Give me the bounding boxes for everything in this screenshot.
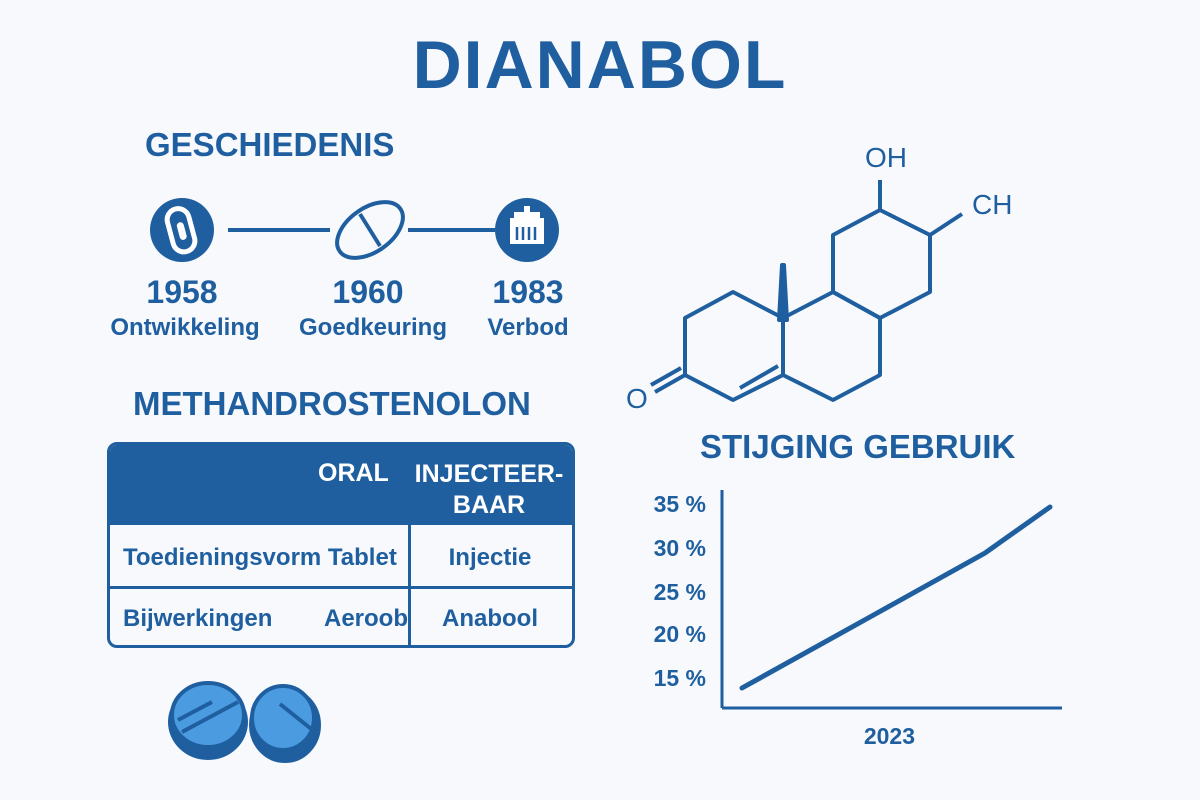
line chart [654, 490, 1062, 749]
line chart: 20 % [654, 621, 706, 647]
icon: pill [327, 191, 413, 269]
molecule [626, 142, 1012, 414]
heading: stijging gebruik: STIJGING GEBRUIK [700, 428, 1015, 465]
timeline labels: 1958 [146, 274, 218, 310]
heading: geschiedenis: GESCHIEDENIS [145, 126, 394, 163]
text: Ontwikkeling [110, 314, 260, 341]
table: Aeroob [324, 605, 408, 632]
molecule: O [626, 383, 648, 414]
icon: building [495, 198, 559, 262]
heading: methandrostenolon: METHANDROSTENOLON [133, 385, 531, 422]
icon: capsule circle [150, 198, 214, 262]
icon: tablets [168, 681, 321, 763]
title: DIANABOL [413, 27, 787, 103]
table [107, 442, 575, 648]
text: 1960 [332, 274, 404, 310]
text: Goedkeuring [299, 314, 447, 341]
line chart: 25 % [654, 579, 706, 605]
text: Verbod [487, 314, 569, 341]
table: INJECTEER- [415, 460, 563, 488]
table: ORAL [318, 459, 389, 487]
table: Bijwerkingen [123, 605, 272, 632]
line chart: 35 % [654, 491, 706, 517]
line chart: 30 % [654, 535, 706, 561]
timeline [150, 198, 559, 262]
table: BAAR [453, 491, 525, 519]
molecule: OH [865, 142, 907, 173]
molecule: CH [972, 189, 1012, 220]
text: 1983 [492, 274, 564, 310]
line chart: 2023 [864, 723, 915, 749]
table: Toedieningsvorm Tablet [123, 544, 397, 571]
table: Injectie [449, 544, 531, 571]
line chart: 15 % [654, 665, 706, 691]
table: Anabool [442, 605, 538, 632]
